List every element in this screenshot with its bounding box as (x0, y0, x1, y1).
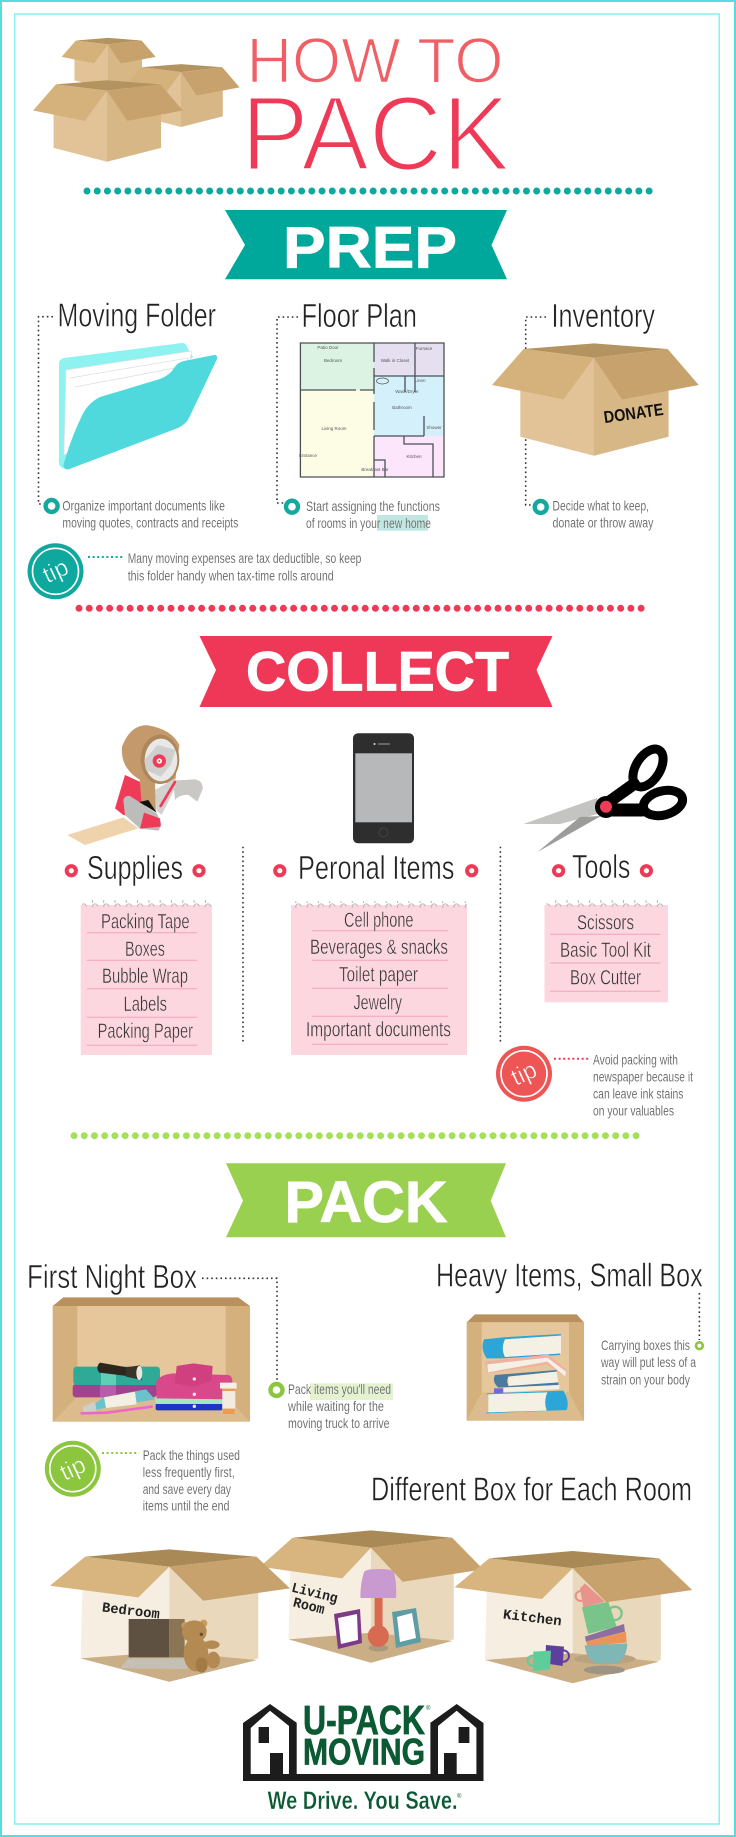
description: inventory: Decide what to keep, (552, 498, 649, 514)
description: heavy items: Carrying boxes this (601, 1337, 690, 1353)
tip connector (102, 1452, 139, 1454)
label: bedroom: Bedroom (101, 1601, 161, 1623)
icon: lamp and frames (334, 1569, 421, 1652)
heading: inventory: Inventory (552, 297, 655, 334)
tip badge: tip (56, 1451, 90, 1487)
note: personal items list: Jewelry (354, 992, 402, 1015)
bullet: heavy items (696, 1342, 703, 1349)
banner: prep: PREP (283, 216, 457, 281)
note: tools list: Basic Tool Kit (560, 939, 651, 962)
note: tools list: Box Cutter (570, 966, 641, 989)
tip badge (28, 543, 84, 599)
description: inventory (552, 498, 653, 531)
tip text: Pack the things used (143, 1447, 240, 1463)
bullet: first night box (270, 1384, 282, 1396)
icon: mugs and bowls (528, 1583, 636, 1674)
panel: bedroom box (50, 1549, 290, 1682)
dotted divider: red (79, 605, 643, 612)
icon: laptop and teddy bear (120, 1619, 220, 1673)
floor plan drawing: Kitchen (406, 454, 422, 459)
note: personal items list: Beverages & snacks (310, 936, 448, 959)
panel: tools (523, 744, 685, 1002)
heading: moving folder: Moving Folder (58, 297, 216, 334)
callout: prep tip (28, 543, 362, 599)
divider: personal items and tools (499, 847, 501, 1044)
description: moving folder (62, 498, 238, 531)
tip text: and save every day (143, 1481, 231, 1497)
description: inventory: donate or throw away (552, 515, 653, 531)
tip badge: tip (39, 554, 73, 589)
callout: pack tip (45, 1441, 240, 1514)
description: moving folder: Organize important documents like (62, 498, 225, 514)
title line: how to: HOW TO (246, 25, 504, 97)
note: personal items list: Toilet paper (339, 964, 418, 987)
note: personal items list: Cell phone (344, 909, 414, 932)
bullet: moving folder (46, 500, 58, 512)
heading: floor plan: Floor Plan (302, 297, 417, 334)
bullet: inventory (535, 501, 547, 513)
connector: inventory (526, 317, 546, 505)
banner: collect: COLLECT (246, 640, 509, 703)
floor plan drawing: Living Room (321, 426, 347, 431)
highlight: items you'll need (310, 1383, 393, 1400)
banner: collect (200, 636, 552, 707)
icon: scissors (523, 744, 685, 852)
icon: stack of three moving boxes (33, 38, 240, 162)
tip text: can leave ink stains (593, 1085, 684, 1101)
icon: donate box: DONATE (603, 400, 665, 427)
label: kitchen: Kitchen (502, 1607, 563, 1631)
note: personal items list (291, 901, 467, 1055)
logo registered mark: ® (426, 1705, 431, 1712)
tip text (593, 1051, 693, 1118)
floor plan drawing: Furnace (416, 346, 433, 351)
label: living room (286, 1581, 339, 1621)
floor plan drawing: Entrance (299, 453, 318, 458)
logo wordmark second line: MOVING (303, 1731, 425, 1772)
tip text: less frequently first, (143, 1464, 235, 1480)
icon: tape dispenser (67, 725, 203, 845)
description: first night box: while waiting for the (287, 1398, 384, 1414)
description: first night box: Pack items you'll need (288, 1381, 391, 1397)
logo wordmark: U-PACK (303, 1697, 425, 1743)
panel: kitchen box (455, 1551, 692, 1683)
heading: first night box: First Night Box (27, 1258, 197, 1295)
description: floor plan: of rooms in your new home (306, 515, 431, 531)
tip text: Avoid packing with (593, 1051, 678, 1067)
floor plan drawing: Bedroom (324, 358, 342, 363)
note: supplies list: Packing Tape (101, 910, 190, 933)
label: living room: Room (291, 1595, 326, 1619)
floor plan drawing: Patio Door (317, 345, 339, 350)
tip text: items until the end (143, 1498, 230, 1514)
description: heavy items (600, 1337, 696, 1387)
note: supplies list: Labels (124, 993, 167, 1016)
connector: floor plan (277, 317, 298, 503)
icon: phone (353, 733, 414, 843)
description: floor plan: Start assigning the functions (306, 498, 440, 514)
panel: supplies (67, 725, 212, 1055)
heading: personal items: Peronal Items (298, 849, 454, 886)
dotted divider: green (74, 1132, 638, 1139)
floor plan drawing: Walk in Closet (381, 358, 410, 363)
panel: heavy items, small box (436, 1257, 703, 1421)
description: first night box: moving truck to arrive (288, 1415, 390, 1431)
banner: prep (225, 210, 507, 281)
tip text: on your valuables (593, 1102, 674, 1118)
logo: u-pack moving (243, 1697, 484, 1815)
panel: first night box (27, 1258, 393, 1431)
tip text (128, 550, 362, 583)
tip connector (554, 1058, 590, 1060)
tip text: Many moving expenses are tax deductible, so keep (128, 550, 362, 566)
floor plan drawing: Breakfast Bar (361, 467, 389, 472)
description: heavy items: way will put less of a (600, 1354, 696, 1370)
panel: inventory (492, 297, 699, 531)
highlight: new home (377, 515, 428, 531)
connector: first night box (202, 1278, 277, 1381)
tip badge (496, 1046, 552, 1102)
description: heavy items: strain on your body (601, 1371, 690, 1387)
note: tools list (544, 900, 668, 1002)
divider: supplies and personal items (242, 847, 244, 1044)
floor plan drawing: Bathroom (392, 405, 412, 410)
tip badge (45, 1441, 101, 1497)
icon: open box with essentials (53, 1297, 250, 1422)
panel: floor plan (277, 297, 444, 531)
logo tagline: We Drive. You Save. (268, 1787, 458, 1815)
title (241, 25, 510, 193)
description: first night box (287, 1381, 391, 1431)
dotted divider: teal (87, 188, 650, 194)
label: living room: Living (290, 1581, 339, 1608)
banner: pack (226, 1163, 506, 1237)
tip text: newspaper because it (593, 1069, 693, 1085)
panel: living room box (260, 1530, 483, 1663)
floor plan drawing (299, 343, 444, 477)
note: tools list: Scissors (577, 911, 634, 934)
note: supplies list: Bubble Wrap (102, 965, 188, 988)
callout: collect tip (496, 1046, 693, 1118)
title line: pack: PACK (241, 75, 510, 193)
description: moving folder: moving quotes, contracts and receipts (62, 515, 238, 531)
note: personal items list: Important documents (306, 1019, 451, 1042)
panel: moving folder (38, 297, 238, 531)
panel: personal items (275, 733, 476, 1055)
floor plan drawing: Linen (414, 378, 426, 383)
note: supplies list: Packing Paper (98, 1020, 193, 1043)
tagline registered mark: ® (457, 1793, 462, 1800)
bullet: floor plan (286, 501, 298, 513)
tip connector (88, 556, 124, 558)
note: supplies list (81, 900, 212, 1055)
icon: box of books (467, 1314, 584, 1421)
tip text (143, 1447, 240, 1514)
heading: tools: Tools (572, 848, 630, 885)
floor plan drawing: Shower (426, 425, 442, 430)
note: supplies list: Boxes (125, 938, 165, 961)
tip badge: tip (507, 1056, 541, 1092)
heading: supplies: Supplies (87, 849, 183, 886)
tip text: this folder handy when tax-time rolls around (128, 567, 334, 583)
icon: folder (59, 343, 217, 469)
connector: moving folder (38, 317, 53, 504)
banner: pack: PACK (284, 1170, 448, 1235)
connector: heavy items (698, 1293, 700, 1340)
description: floor plan (306, 498, 440, 531)
logo houses (243, 1704, 484, 1781)
floor plan drawing: Wash/Dryer (395, 389, 419, 394)
icon: donate box (492, 343, 699, 456)
